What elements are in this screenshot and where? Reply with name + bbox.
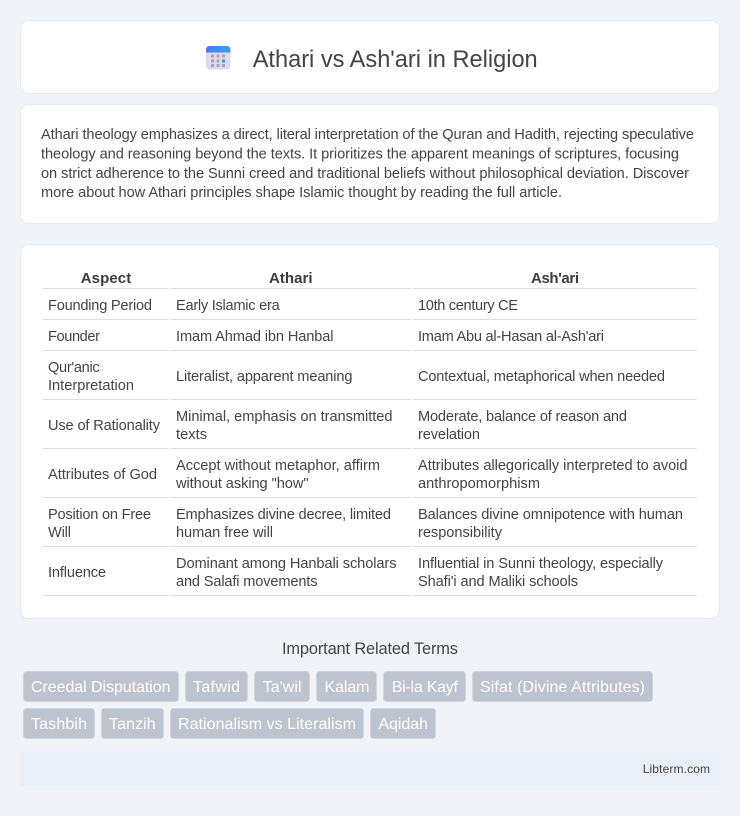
text block: introduction: theology and reasoning beyond the texts. It prioritizes the apparent meanings of scriptures, focusing xyxy=(41,146,679,162)
title: Athari vs Ash'ari in Religion xyxy=(253,46,538,73)
row: use of rationality: Minimal, emphasis on transmitted xyxy=(176,409,392,425)
row: use of rationality: Moderate, balance of reason and xyxy=(418,409,627,425)
row: influence xyxy=(48,556,664,590)
tag: Creedal Disputation xyxy=(24,672,178,702)
row: founding period: Early Islamic era xyxy=(176,298,281,314)
row: founder: Imam Ahmad ibn Hanbal xyxy=(176,329,334,345)
row: attributes of god: anthropomorphism xyxy=(418,476,540,492)
table header: Ash'ari xyxy=(531,270,579,287)
table header: Aspect xyxy=(81,270,131,287)
tag: Tafwid: Tafwid xyxy=(193,679,240,696)
row: influence: Influence xyxy=(48,565,106,581)
row: quranic interpretation: Qur'anic xyxy=(48,360,100,376)
text block: introduction xyxy=(41,127,694,201)
tag: Creedal Disputation: Creedal Disputation xyxy=(31,679,170,696)
row: attributes of god: Accept without metaphor, affirm xyxy=(176,458,380,474)
tag: Aqidah: Aqidah xyxy=(378,716,428,733)
tag: Rationalism vs Literalism: Rationalism vs Literalism xyxy=(178,716,356,733)
row: use of rationality xyxy=(48,409,627,443)
row: influence: Influential in Sunni theology, especially xyxy=(418,556,664,572)
row: attributes of god: Attributes of God xyxy=(48,467,157,483)
panel: introduction xyxy=(20,104,720,224)
row: quranic interpretation xyxy=(48,360,665,394)
icon: calendar xyxy=(206,46,230,70)
row: quranic interpretation: Contextual, metaphorical when needed xyxy=(418,369,665,385)
heading: important related terms: Important Related Terms xyxy=(282,640,458,658)
panel: header xyxy=(20,20,720,94)
row: founder xyxy=(48,329,604,345)
row: influence: Dominant among Hanbali scholars xyxy=(176,556,396,572)
tag: Tanzih xyxy=(102,708,164,738)
row: position on free will: human free will xyxy=(176,525,273,541)
text block: introduction: more about how Athari principles shape Islamic thought by reading the full article. xyxy=(41,185,562,201)
tag: Ta'wil: Ta'wil xyxy=(263,679,302,696)
table header xyxy=(81,270,579,287)
row: influence: and Salafi movements xyxy=(176,574,318,590)
row: influence: Shafi'i and Maliki schools xyxy=(418,574,578,590)
row: founding period: Founding Period xyxy=(48,298,152,314)
tag: Tafwid xyxy=(186,672,248,702)
row: position on free will: Emphasizes divine decree, limited xyxy=(176,507,391,523)
tag: Sifat: Sifat (Divine Attributes) xyxy=(480,679,645,696)
panel: comparison table xyxy=(20,244,720,618)
row: use of rationality: Use of Rationality xyxy=(48,418,161,434)
tag: Tashbih xyxy=(24,708,94,738)
row: founding period: 10th century CE xyxy=(418,298,518,314)
text block: introduction: on strict adherence to the Sunni creed and traditional beliefs without philosophical deviation. Discover xyxy=(41,166,689,182)
row: attributes of god: without asking "how" xyxy=(175,476,308,492)
footer credit: Libterm.com xyxy=(643,762,710,776)
tag: Ta'wil xyxy=(254,672,310,702)
footer xyxy=(20,752,720,786)
row: quranic interpretation: Interpretation xyxy=(48,378,134,394)
row: attributes of god xyxy=(48,458,688,492)
row: position on free will xyxy=(48,507,683,541)
row: position on free will: responsibility xyxy=(418,525,503,541)
tag: Sifat xyxy=(472,672,652,702)
tags: related terms xyxy=(24,672,652,738)
table header: Athari xyxy=(269,270,312,287)
row: use of rationality: texts xyxy=(176,427,207,443)
text block: introduction: Athari theology emphasizes a direct, literal interpretation of the Quran and Hadith, rejecting speculative xyxy=(41,127,694,143)
row: attributes of god: Attributes allegorically interpreted to avoid xyxy=(418,458,688,474)
tag: Aqidah xyxy=(370,708,436,738)
row: position on free will: Balances divine omnipotence with human xyxy=(418,507,683,523)
row: founding period xyxy=(48,298,518,314)
tag: Tashbih: Tashbih xyxy=(31,716,87,733)
row: position on free will: Will xyxy=(48,525,71,541)
tag: Tanzih: Tanzih xyxy=(109,716,156,733)
row: founder: Imam Abu al-Hasan al-Ash'ari xyxy=(418,329,604,345)
tag: Kalam xyxy=(316,672,376,702)
table row lines xyxy=(43,288,697,596)
row: position on free will: Position on Free xyxy=(48,507,151,523)
row: quranic interpretation: Literalist, apparent meaning xyxy=(176,369,352,385)
row: founder: Founder xyxy=(48,329,100,345)
tag: Bi-la Kayf xyxy=(384,672,466,702)
tag: Kalam: Kalam xyxy=(324,679,370,696)
tag: Bi-la Kayf: Bi-la Kayf xyxy=(392,679,459,696)
row: use of rationality: revelation xyxy=(418,427,480,443)
tag: Rationalism vs Literalism xyxy=(170,708,364,738)
